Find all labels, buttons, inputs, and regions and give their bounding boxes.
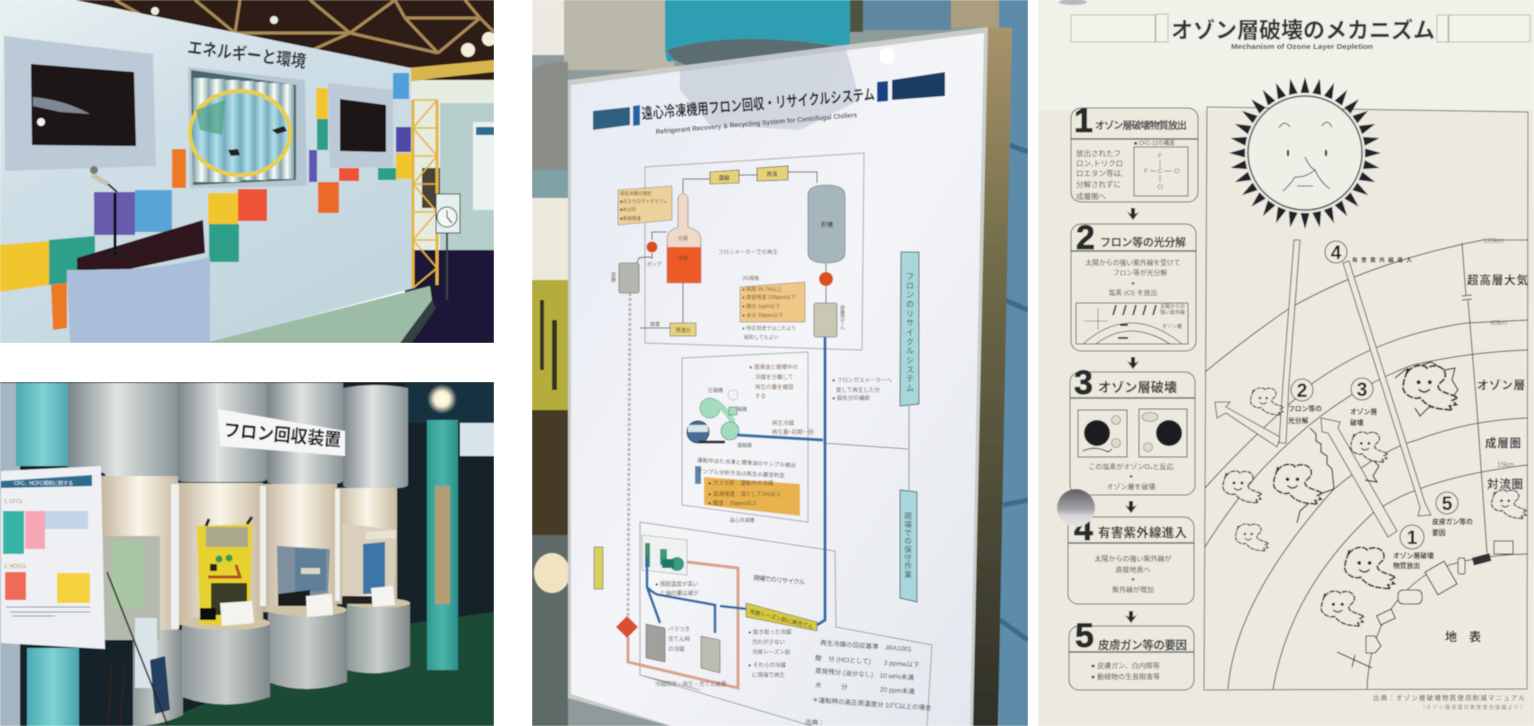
step 5 box: 皮膚ガン等の要因 (1098, 638, 1187, 652)
title: オゾン層破壊のメカニズム (1171, 18, 1435, 43)
white board (568, 27, 988, 726)
diagram step labels: 有害紫外線進入 (1352, 256, 1412, 264)
step 1 box: 1 (1074, 102, 1093, 140)
red diamond (616, 616, 638, 638)
step 4 box: 有害紫外線進入 (1098, 525, 1187, 540)
sign: refrigerant recovery equipment: フロン回収装置 (223, 420, 342, 450)
step 4 box: ● (1131, 577, 1135, 583)
diagram step labels: オゾン層破壊 (1393, 551, 1434, 560)
sampling text and box: 運転中ほた冷凍と潤滑油のサンプル検出 (697, 456, 796, 469)
sampling text and box: サンプル分析方法は再生の要否判定 (697, 467, 786, 480)
surface objects (1337, 541, 1513, 668)
beige recovery machine (342, 523, 396, 604)
surroundings (532, 0, 1028, 726)
step 1 box (1071, 102, 1198, 202)
sampling text and box: ● ガス分析：運転中の冷媒 (708, 479, 774, 487)
JIS specification box: ● 水分 20ppm以下 (742, 312, 783, 319)
salmon oil loop (628, 562, 738, 688)
regulation info board (1, 466, 105, 649)
step 1 box: F (1144, 169, 1148, 175)
silver lower cylinders (133, 598, 410, 726)
yellow process boxes (710, 166, 788, 184)
illuminated niches (100, 476, 397, 630)
on-site notes: ● それらの冷媒 (748, 661, 786, 669)
pumps: ポンプ (647, 261, 661, 268)
diagram step labels: 要因 (1432, 529, 1446, 537)
sampling text and box (697, 456, 800, 516)
step 3 box: オゾン層破壊 (1098, 380, 1177, 395)
step 1 box: Cl (1174, 169, 1180, 175)
yellow recovery machine (197, 517, 252, 625)
on-site notes: 充てん時 (668, 635, 691, 643)
recycle notes: ● フロンガスメーカーへ (832, 376, 892, 384)
yellow truss (413, 100, 437, 288)
blue-gray recovery machine (277, 546, 330, 606)
recycle notes: 戻して再生した分 (836, 386, 880, 394)
step 1 box: ロエタン等は, (1076, 168, 1123, 178)
regulation info board: CFC、HCFC規制に関する (14, 480, 73, 487)
step 1 box: 成層圏へ (1076, 191, 1106, 201)
on-site notes: ● 抜き取った冷媒 (748, 628, 792, 636)
teal right pillar (427, 420, 458, 670)
altitude axis (1462, 243, 1487, 553)
step 2 box: ● (1131, 281, 1135, 287)
step 4 box: 直接地表へ (1116, 565, 1150, 574)
distillation vessel (667, 193, 701, 283)
step 2 box: 太陽からの (1160, 303, 1185, 310)
step 2 box: 太陽からの強い紫外線を受けて (1085, 258, 1181, 267)
regulation info board: 2. HCFCs (4, 564, 26, 570)
step 1 box: ロン,トリクロ (1076, 159, 1123, 168)
yellow process boxes: 原液 (766, 170, 778, 178)
board title band and heading (593, 72, 945, 136)
blue on-site pipes (647, 557, 747, 633)
sampling text and box: ● 酸度：20ppm以上 (708, 499, 758, 507)
on-site notes: バラつき (668, 626, 690, 633)
centrifugal chiller section: 補機 (737, 406, 747, 413)
on-site notes: に現場で再生 (752, 671, 786, 679)
step number badges (1291, 241, 1458, 549)
on-site notes: 汚れが少ない (752, 638, 786, 646)
step 1 box: 分解されずに (1076, 179, 1121, 189)
JRA1001 standards table: 水 分 20 ppm未満 (815, 680, 915, 696)
back of hall (405, 60, 494, 343)
step 1 box: C (1158, 169, 1163, 175)
maker regeneration label: フロンメーカーでの再生 (718, 248, 778, 256)
step 4 box: 紫外線が増加 (1112, 585, 1154, 594)
left framed panel (4, 36, 156, 171)
altitude and layer labels: 成層圏 (1485, 436, 1521, 450)
source credit (1373, 693, 1526, 711)
JIS specification box: ● 酸分 1ppm以下 (742, 303, 780, 310)
heading: Energy and Environment: エネルギーと環境 (187, 38, 307, 71)
gray dashed vertical line (628, 293, 630, 617)
altitude and layer labels: 対流圏 (1487, 477, 1523, 491)
main blue refrigerant pipe (737, 337, 825, 625)
sign: refrigerant recovery equipment (218, 409, 345, 456)
JRA1001 standards table: 蒸発残分 (油分なし) 10 wt%未満 (815, 666, 915, 682)
panel: mechanism of ozone layer depletion (1038, 0, 1534, 726)
microphone (90, 166, 135, 262)
clock sign (436, 194, 460, 300)
centrifugal chiller section: 再生冷媒 (772, 419, 795, 427)
photo: centrifugal chiller recycling board (532, 0, 1028, 726)
sampling text and box: ● 高沸残渣：油として5%以上 (708, 490, 782, 498)
regulation info board: 1. CFCs (4, 499, 23, 505)
step 1 box: 放出されたフ (1076, 148, 1121, 158)
step 4 box (1068, 510, 1194, 604)
step 2 box: 塩素 (Cl) を放出 (1109, 288, 1158, 297)
maker regeneration section frame (645, 153, 864, 350)
step 1 box: F (1158, 154, 1162, 160)
step 5 box: ● 皮膚ガン、白内障等 (1091, 661, 1160, 670)
board title band and heading: Refrigerant Recovery & Recycling System for Centrifugal Chillers (656, 112, 858, 136)
on-site notes: ● 周囲温度が高い (655, 580, 699, 588)
step 3 box: ● (1129, 474, 1133, 480)
podium top (77, 220, 205, 270)
teal overhead cylinder (665, 0, 850, 62)
diagram step labels: 物質放出 (1393, 561, 1420, 570)
altitude and layer labels: 120km (1483, 238, 1504, 245)
brochure rack (104, 536, 170, 726)
pipes in regeneration section (637, 172, 826, 328)
analysis box (618, 186, 672, 225)
step 2 box: 2 (1076, 219, 1095, 257)
podium cylinder (67, 257, 210, 343)
atmosphere layer arcs (1205, 240, 1528, 689)
residue box: 残渣分 (675, 327, 691, 334)
title (1071, 14, 1530, 51)
step number badges: 5 (1442, 494, 1453, 515)
step 3 box: 3 (1074, 364, 1093, 402)
arrow (1127, 208, 1139, 220)
photo: refrigerant recovery equipment exhibit (0, 382, 494, 726)
step number badges: 3 (1357, 380, 1367, 401)
step number badges: 2 (1297, 381, 1307, 402)
altitude and layer labels: 地 表 (1445, 629, 1481, 644)
double-line process arrows (1215, 240, 1431, 537)
centrifugal chiller section: ● 潤滑油と循環中の (749, 363, 798, 371)
step 3 box (1070, 364, 1195, 495)
photo: energy and environment exhibit wall (0, 0, 496, 343)
centrifugal chiller section: 圧縮機 (708, 387, 723, 394)
step 4 box: 太陽からの強い紫外線が (1094, 554, 1172, 563)
JIS specification box: ● 純度 99.7%以上 (742, 286, 782, 293)
cylinders (610, 263, 845, 337)
centrifugal chiller section: 遠心冷凍機 (729, 517, 755, 524)
JRA1001 standards table: 再生冷媒の回収基準 JRA1001 (820, 638, 912, 653)
on-site notes: と抽出量は減少 (660, 589, 699, 597)
vertical label: recycling system (900, 252, 919, 406)
step 1 box: オゾン層破壊物質放出 (1095, 119, 1187, 132)
source credit: 出典：オゾン層破壊物質使用削減マニュアル (1373, 693, 1526, 702)
step 1 box: Cl (1157, 185, 1163, 191)
altitude and layer labels: オゾン層 (1477, 379, 1525, 392)
JRA1001 standards table: 酸 分 (HClとして) 3 ppmw以下 (815, 653, 920, 669)
on-site notes: 冷房シーズン前 (752, 648, 791, 656)
arrow (1127, 357, 1139, 369)
JRA1001 standards table (805, 638, 932, 726)
step 1 box: ■ CFC-12の構造 (1134, 139, 1175, 147)
storage tank (808, 185, 845, 263)
arrow (1125, 501, 1137, 513)
step 2 box: フロン等が光分解 (1113, 268, 1167, 277)
connector lines (823, 406, 909, 490)
ozone hole jagged outlines (1297, 362, 1458, 523)
hall background (150, 383, 494, 726)
analysis box: ■ガスクロマトグラフィ (620, 198, 668, 205)
teal column upper (16, 383, 70, 466)
recycle notes: ● 損失分の補給 (832, 394, 870, 402)
green bench (205, 286, 432, 343)
atmosphere diagram frame (1204, 107, 1528, 690)
diagram step labels (1288, 256, 1473, 570)
centrifugal chiller section: する (755, 393, 766, 400)
vertical label: recycling system: フロンのリサイクルシステム (906, 272, 914, 392)
distillation vessel: 液槽 (678, 255, 688, 262)
on-site recycling section frame (640, 522, 932, 726)
cylinders: 容器充てん (839, 304, 845, 330)
step number badges: 4 (1331, 243, 1342, 264)
silver upper columns (68, 383, 408, 488)
wall (0, 0, 414, 343)
distillation vessel: 分留 (678, 235, 688, 242)
pumps (646, 242, 833, 286)
arrow (1125, 611, 1137, 623)
gray recovery tanks (646, 624, 720, 673)
left yellow box (594, 547, 603, 589)
on-site notes (655, 580, 792, 688)
analysis box: ■水分計 (620, 206, 637, 213)
right framed panel (328, 83, 393, 168)
compressor diagram (687, 390, 739, 484)
green on-site equipment (642, 535, 687, 575)
step 4 box: 4 (1074, 510, 1093, 548)
yellow process boxes: 濃縮 (718, 174, 730, 182)
centrifugal chiller section: 冷媒を分離して (755, 373, 793, 381)
centrifugal chiller section: 再生量=初期一括 (772, 428, 814, 436)
diagram step labels: 光分解 (1288, 416, 1309, 425)
sphere magnet (1057, 489, 1095, 527)
on-site notes: 冷媒回収・再生・充てん装置 (655, 680, 727, 688)
JIS specification box: 緩和してもよい (744, 334, 779, 341)
teal column lower (27, 648, 79, 726)
centrifugal chiller section: 再生の量を確認 (755, 383, 794, 391)
title: Mechanism of Ozone Layer Depletion (1231, 42, 1373, 51)
ceiling lattice (75, 0, 494, 81)
step 3 box: この塩素がオゾンO₃と反応 (1088, 462, 1174, 471)
altitude and layer labels: 15km (1497, 462, 1514, 469)
altitude and layer labels: 40km (1490, 320, 1507, 327)
diagram step labels: 皮膚ガン等の (1432, 517, 1473, 526)
step 5 box (1069, 617, 1194, 690)
CFC cartoon clouds (1223, 365, 1527, 626)
JIS specification box: ● 蒸留残渣 100ppm以下 (742, 294, 796, 301)
illuminated globe window (188, 67, 307, 188)
step 2 box (1071, 219, 1196, 351)
step 2 box: フロン等の光分解 (1100, 235, 1186, 249)
recycle notes (832, 376, 892, 402)
machine caption cards (220, 586, 395, 626)
altitude and layer labels: 超高層大気 (1467, 273, 1528, 287)
analysis box: ■蒸発残渣 (620, 215, 641, 222)
source credit: （オゾン層保護対策推進会議編より） (1420, 704, 1525, 711)
board title band and heading: 遠心冷凍機用フロン回収・リサイクルシステム (641, 86, 876, 123)
step 2 box: 強い紫外線 (1160, 309, 1185, 316)
step number badges: 1 (1407, 528, 1418, 549)
storage tank: 貯槽 (821, 221, 833, 229)
step 2 box: オゾン層 (1162, 324, 1182, 330)
JIS specification box (740, 275, 805, 341)
on-site notes: の冷媒 (668, 645, 685, 653)
sun with face (1229, 77, 1381, 229)
diagram step labels: フロン等の (1288, 404, 1322, 413)
altitude and layer labels (1445, 238, 1528, 644)
vertical label: on-site maintenance: 現場での保守作業 (903, 512, 912, 579)
JIS specification box: JIS規格 (742, 275, 759, 282)
colored tiles (0, 73, 412, 330)
yellow recharge box: 冷房シーズン前に再充てん (749, 607, 815, 631)
residue box: 廃棄 (650, 321, 660, 328)
JRA1001 standards table: ＊運転時の高圧周温度分 10℃以上の場合 (812, 695, 932, 712)
centrifugal chiller section: 凝縮器 (737, 442, 752, 449)
cylinders: 容器 (610, 271, 616, 283)
diagram step labels: 破壊 (1350, 418, 1364, 427)
residue box (650, 321, 696, 336)
recycling section label: 現場でのリサイクル (753, 573, 806, 587)
centrifugal chiller section (682, 352, 814, 524)
step 3 box: オゾン層を破壊 (1106, 482, 1156, 491)
step 5 box: ● 動植物の生長阻害等 (1091, 672, 1160, 681)
vertical label: on-site maintenance (900, 490, 917, 602)
step 5 box: 5 (1075, 617, 1094, 655)
diagram step labels: オゾン層 (1350, 408, 1377, 416)
analysis box: 再生冷媒の測定 (620, 190, 652, 197)
JIS specification box: ● 特定用途ではこれより (742, 325, 796, 332)
